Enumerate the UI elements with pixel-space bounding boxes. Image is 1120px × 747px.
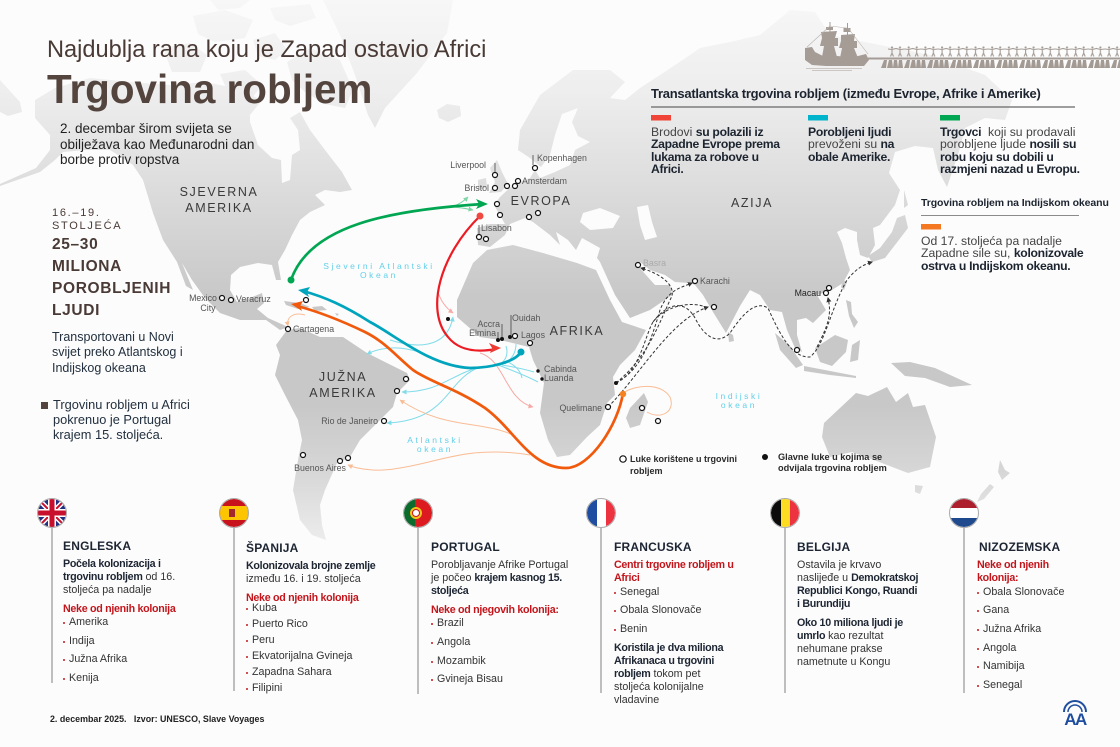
country: france: Benin <box>620 623 647 635</box>
country: netherlands: Obala Slonovače <box>983 586 1064 598</box>
description <box>797 559 918 610</box>
port labels: Basra <box>643 258 666 268</box>
route: green traders <box>288 199 488 284</box>
country: netherlands: Gana <box>983 604 1009 616</box>
legend text: main ports <box>778 452 887 473</box>
country: spain: Kuba <box>252 602 277 614</box>
main heading: Trgovina robljem <box>47 66 372 112</box>
text: red route: lukama za robove u <box>651 150 759 164</box>
continent labels: AFRIKA <box>550 324 604 338</box>
country: england: Južna Afrika <box>69 653 127 665</box>
panel heading: indian ocean: Trgovina robljem na Indijskom okeanu <box>921 197 1109 209</box>
note text: krajem 15. stoljeća. <box>53 427 163 442</box>
key figure: 25–30 <box>52 236 98 253</box>
transport text: svijet preko Atlantskog i <box>52 345 183 359</box>
panel rules <box>651 107 1079 216</box>
continent labels: AMERIKA <box>309 386 377 400</box>
text: green route: robu koju su dobili u <box>940 150 1054 164</box>
note text: pokrenuo je Portugal <box>53 412 171 427</box>
country: belgium <box>797 540 918 668</box>
port labels: Lagos <box>521 330 546 340</box>
text: teal route <box>808 125 894 164</box>
country: netherlands: Namibija <box>983 660 1025 672</box>
text: teal route: prevoženi su na <box>808 137 894 151</box>
south america <box>275 328 410 540</box>
southeast asia islands <box>728 280 972 387</box>
caribbean <box>284 301 339 316</box>
icon: chain of enslaved people <box>868 46 1120 68</box>
description: Kolonizovala brojne zemlje <box>246 560 375 572</box>
text: red route: Zapadne Evrope prema <box>651 137 780 151</box>
port labels: Karachi <box>700 276 730 286</box>
continent labels: AZIJA <box>731 196 773 210</box>
route: teal enslaved <box>298 287 524 368</box>
country: spain: Filipini <box>252 682 282 694</box>
text: teal route: obale Amerike. <box>808 150 890 164</box>
japan <box>868 190 908 262</box>
icon: slave ship <box>805 22 869 71</box>
legend text: main ports: odvijala trgovina robljem <box>778 463 887 473</box>
description: je počeo krajem kasnog 15. <box>431 572 562 584</box>
port labels: Mexico <box>189 293 217 303</box>
text: orange route: Zapadne sile su, kolonizovale <box>921 246 1083 260</box>
country: portugal: Gvineja Bisau <box>437 673 503 685</box>
continent labels: EVROPA <box>511 194 571 208</box>
siberia end <box>0 80 22 116</box>
key figure <box>52 236 171 319</box>
arctic islands <box>163 0 353 108</box>
ports: main black dots <box>446 317 618 385</box>
flag: portugal <box>404 498 432 528</box>
port labels: Veracruz <box>236 294 271 304</box>
continent labels: AMERIKA <box>185 201 253 215</box>
legend text: ports used: robljem <box>630 466 663 476</box>
description <box>430 559 568 597</box>
ports: open circles <box>220 166 832 464</box>
description: Republici Kongo, Ruandi <box>797 585 917 597</box>
text: orange route <box>921 234 1084 273</box>
description: Počela kolonizacija i <box>63 558 161 570</box>
description 2: Oko 10 miliona ljudi je <box>797 617 903 629</box>
legend text: ports used: Luke korištene u trgovini <box>630 454 737 464</box>
intro text: obilježava kao Međunarodni dan <box>60 136 254 152</box>
subheading: Neke od njenih kolonija <box>246 592 358 604</box>
description: vladavine <box>614 694 659 706</box>
name: NIZOZEMSKA <box>979 540 1060 554</box>
iceland <box>437 104 461 122</box>
description: stoljeća <box>431 585 468 597</box>
country: france <box>614 540 734 706</box>
description 2 <box>797 617 903 668</box>
description: stoljeća pa nadalje <box>63 584 152 596</box>
country: england <box>63 539 176 684</box>
africa <box>457 245 646 457</box>
flag: spain <box>220 498 248 528</box>
subheading: kolonija: <box>977 572 1018 584</box>
continent labels: SJEVERNA <box>180 185 258 199</box>
transport text: Transportovani u Novi <box>52 330 174 344</box>
new zealand <box>977 460 1010 502</box>
flag: belgium <box>770 498 800 528</box>
text: red route: Africi. <box>651 162 683 176</box>
panel heading: transatlantic: Transatlantska trgovina robljem (između Evrope, Afrike i Amerike) <box>651 86 1041 101</box>
colony list <box>246 602 352 694</box>
key figure: LJUDI <box>52 302 100 319</box>
legend text: main ports: Glavne luke u kojima se <box>778 452 882 462</box>
icon: AA logo <box>1064 701 1087 729</box>
flag: england <box>38 498 66 528</box>
subheading <box>614 559 734 584</box>
ocean labels: Atlantski <box>407 435 463 445</box>
country: spain: Zapadna Sahara <box>252 666 332 678</box>
text: green route: razmjeni nazad u Evropu. <box>940 162 1080 176</box>
period label: STOLJEĆA <box>52 220 122 232</box>
port labels: Elmina <box>469 328 496 338</box>
north america <box>0 78 352 330</box>
port labels: Ouidah <box>512 313 540 323</box>
name: BELGIJA <box>797 540 850 554</box>
country: netherlands <box>977 540 1064 691</box>
country: portugal: Mozambik <box>437 655 486 667</box>
description 2: umrlo kao rezultat <box>797 630 883 642</box>
port labels: Cabinda <box>544 364 577 374</box>
port labels: Macau <box>795 288 821 298</box>
description 2: nehumane prakse <box>797 643 883 655</box>
port labels: Quelimane <box>559 403 602 413</box>
description: Koristila je dva miliona <box>614 642 723 654</box>
text: red route: Brodovi su polazili iz <box>651 125 763 139</box>
description <box>246 560 376 585</box>
thin routes <box>288 197 671 470</box>
legend: symbols <box>620 454 768 462</box>
text: green route: porobljene ljude nosili su <box>940 137 1076 151</box>
description <box>614 642 724 706</box>
uk ireland <box>478 160 508 193</box>
description: i Burundiju <box>797 598 850 610</box>
note text <box>53 397 190 442</box>
ocean labels: Sjeverni Atlantski <box>323 261 435 271</box>
period label: 16.–19. <box>52 207 101 219</box>
text: red route <box>651 125 780 176</box>
country: portugal: Brazil <box>437 617 464 629</box>
port labels: Cartagena <box>293 324 334 334</box>
country: france: Senegal <box>620 586 659 598</box>
port labels: Kopenhagen <box>537 153 587 163</box>
australia <box>822 387 936 494</box>
country: spain <box>246 541 376 694</box>
colony list <box>63 616 128 684</box>
continent labels: JUŽNA <box>319 369 367 384</box>
port labels: Lisabon <box>481 223 512 233</box>
country: netherlands: Južna Afrika <box>983 623 1041 635</box>
transport text <box>52 330 183 375</box>
route: orange colonial <box>291 301 626 468</box>
icon: AA logo: AA <box>1064 710 1087 729</box>
port labels: City <box>200 303 216 313</box>
text: teal route: Porobljeni ljudi <box>808 125 891 139</box>
description: Porobljavanje Afrike Portugal <box>431 559 568 571</box>
description <box>63 558 175 596</box>
country: spain: Peru <box>252 634 275 646</box>
note bullet <box>41 402 48 409</box>
subheading: Neke od njenih <box>977 559 1049 571</box>
country: portugal: Angola <box>437 636 470 648</box>
flag stems <box>52 528 964 694</box>
text: green route: Trgovci koji su prodavali <box>940 125 1075 139</box>
subheading: Neke od njegovih kolonija: <box>431 604 559 616</box>
name: ŠPANIJA <box>246 541 299 555</box>
legend text: ports used <box>630 454 737 476</box>
portugal note <box>41 397 190 442</box>
colony list <box>614 586 701 635</box>
text: orange route: ostrva u Indijskom okeanu. <box>921 259 1070 273</box>
intro text: 2. decembar širom svijeta se <box>60 121 232 136</box>
period label <box>52 207 122 232</box>
subheading <box>977 559 1049 584</box>
flag: netherlands <box>950 498 978 528</box>
description: Afrikanaca u trgovini <box>614 655 714 667</box>
dashed indian ocean routes <box>608 262 872 407</box>
description: naslijeđe u Demokratskoj <box>797 572 918 584</box>
port labels: Rio de Janeiro <box>321 416 378 426</box>
name: ENGLESKA <box>63 539 131 553</box>
continent labels <box>180 185 773 400</box>
colony list <box>431 617 503 685</box>
ocean labels: okean <box>417 444 453 454</box>
intro text: borbe protiv ropstva <box>60 152 179 167</box>
description: robljem tokom pet <box>614 668 700 680</box>
port label ticks <box>479 155 533 338</box>
greenland <box>323 0 453 128</box>
footer source: 2. decembar 2025. Izvor: UNESCO, Slave Voyages <box>50 714 264 724</box>
subheading: Centri trgovine robljem u <box>614 559 734 571</box>
country: spain: Ekvatorijalna Gvineja <box>252 650 352 662</box>
intro text <box>60 121 254 167</box>
route: red ships <box>437 212 501 353</box>
port labels: Luanda <box>544 373 573 383</box>
ocean labels <box>323 261 762 454</box>
port labels: Accra <box>478 319 500 329</box>
madagascar <box>626 393 648 428</box>
flag: france <box>586 498 616 528</box>
country: netherlands: Angola <box>983 642 1016 654</box>
subheading: Africi <box>614 572 640 584</box>
ocean labels: Okean <box>360 270 398 280</box>
description: trgovinu robljem od 16. <box>63 571 175 583</box>
country: england: Indija <box>69 635 95 647</box>
title: Najdublja rana koju je Zapad ostavio Africi <box>47 37 486 63</box>
country: france: Obala Slonovače <box>620 604 701 616</box>
country: england: Amerika <box>69 616 108 628</box>
note text: Trgovinu robljem u Africi <box>53 397 190 412</box>
colour swatches <box>651 115 960 230</box>
port labels: Amsterdam <box>522 176 567 186</box>
port labels: Liverpool <box>450 160 486 170</box>
text: green route <box>940 125 1080 176</box>
name: PORTUGAL <box>431 540 500 554</box>
port labels: Buenos Aires <box>294 463 347 473</box>
description: između 16. i 19. stoljeća <box>246 573 361 585</box>
transport text: Indijskog okeana <box>52 361 146 375</box>
port labels <box>189 153 821 473</box>
eurasia <box>477 10 1012 352</box>
key figure: POROBLJENIH <box>52 280 171 297</box>
country: netherlands: Senegal <box>983 679 1022 691</box>
colony list <box>977 586 1064 691</box>
description: stoljeća kolonijalne <box>614 681 704 693</box>
subheading: Neke od njenih kolonija <box>63 603 175 615</box>
description: Ostavila je krvavo <box>797 559 881 571</box>
ocean labels: okean <box>721 400 757 410</box>
description 2: nametnute u Kongu <box>797 656 890 668</box>
country: spain: Puerto Rico <box>252 618 308 630</box>
text: orange route: Od 17. stoljeća pa nadalje <box>921 234 1062 248</box>
ocean labels: Indijski <box>716 391 762 401</box>
key figure: MILIONA <box>52 258 122 275</box>
port labels: Bristol <box>465 183 489 193</box>
country: england: Kenija <box>69 672 99 684</box>
name: FRANCUSKA <box>614 540 692 554</box>
country: portugal <box>430 540 568 685</box>
